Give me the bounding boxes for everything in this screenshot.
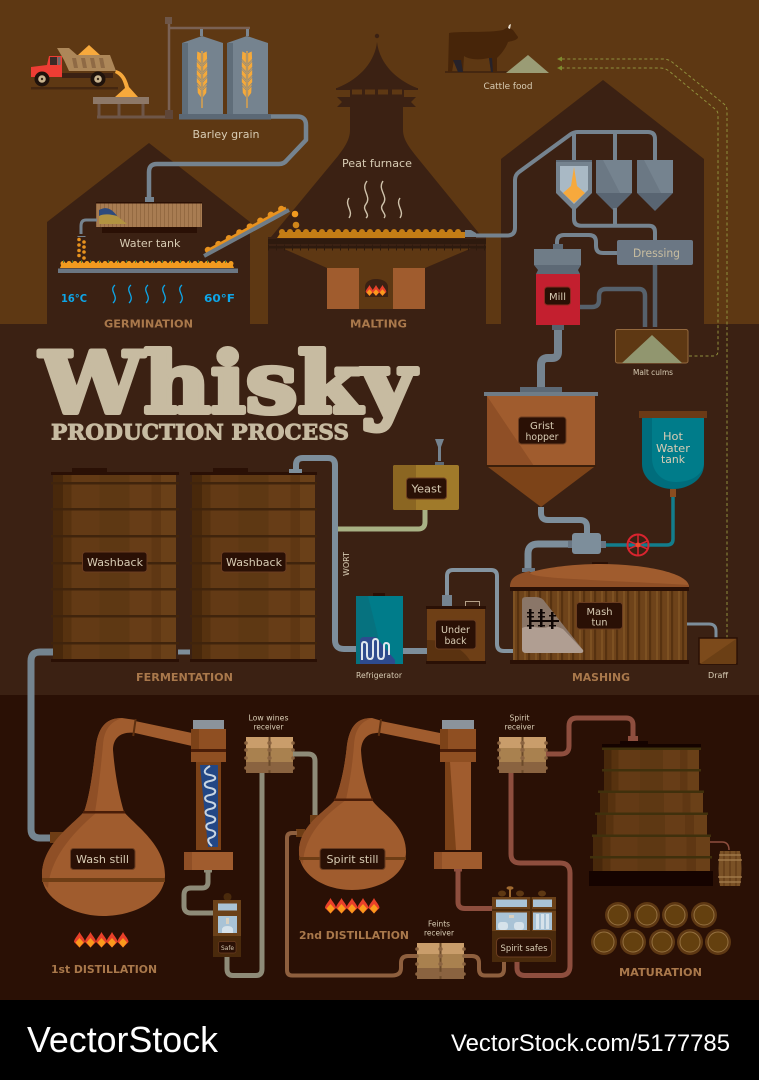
grist hopper: Grist [530, 421, 554, 432]
heading: malting: MALTING [350, 318, 407, 330]
condenser 2 [434, 720, 482, 872]
hot water tank: Water [656, 442, 690, 455]
valve [628, 534, 648, 556]
pipe: underback to mash tun [447, 570, 513, 651]
water tank [77, 197, 202, 260]
panel: germination building [47, 143, 250, 325]
spirit receiver [497, 737, 548, 773]
mill [534, 244, 581, 330]
spirit safes: Spirit safes [500, 944, 548, 954]
panel: malting building [268, 34, 486, 325]
background: upper zone [0, 0, 759, 325]
pipe: spirit receiver to safes return [511, 773, 570, 976]
heading: 2nd distillation: 2nd DISTILLATION [299, 929, 409, 942]
label: cattle food: Cattle food [484, 82, 532, 92]
grist hopper: hopper [526, 432, 559, 443]
spirit still: Spirit still [326, 853, 378, 866]
wash still: Wash still [76, 853, 129, 866]
hot water tank: tank [661, 453, 686, 466]
casks [591, 902, 731, 955]
small barrel [710, 842, 742, 886]
pipe: hopper to mixing box [541, 507, 587, 534]
label: low wines receiver: Low wines [248, 714, 289, 722]
grain chute and loading table [93, 17, 250, 119]
safe: Safe [221, 944, 234, 952]
footer band [0, 1000, 759, 1080]
pipe: condenser 2 to spirit safes [458, 871, 492, 908]
background: lower zone [0, 695, 759, 1001]
maturation vat [589, 736, 713, 886]
label: feints receiver: Feints [428, 920, 450, 928]
washback left [51, 468, 179, 662]
underback: back [444, 636, 467, 647]
underback: Under [441, 625, 471, 636]
pipe: safe to low wines receiver [227, 773, 262, 976]
title: PRODUCTION PROCESS [51, 420, 349, 444]
flames: spirit still [325, 898, 380, 914]
pipe: washback to refrigerator (wort) [296, 458, 357, 649]
pipes: culms lines [580, 265, 655, 327]
feints receiver [415, 943, 466, 979]
grist hopper [484, 387, 598, 507]
malting bed [268, 230, 486, 248]
label: feints receiver [424, 920, 455, 938]
smoke [348, 181, 401, 218]
washback connecting pipe [178, 650, 190, 654]
washback left: Washback [87, 556, 144, 569]
footer: url: VectorStock.com/5177785 [451, 1030, 730, 1057]
mash tun [510, 562, 689, 664]
hoppers [556, 160, 673, 211]
pipe: hot water [605, 497, 673, 545]
mixing box [568, 533, 606, 554]
heading: germination: GERMINATION [104, 318, 193, 330]
label: low wines receiver [248, 714, 289, 732]
mill: Mill [549, 292, 566, 303]
pipe: box to mash tun [528, 544, 572, 570]
pipe: mill to grist hopper [541, 330, 558, 388]
label: spirit receiver: receiver [504, 722, 535, 732]
label: peat furnace: Peat furnace [342, 157, 412, 170]
pipe: refrigerator to underback [403, 648, 427, 654]
hot water tank [639, 411, 707, 497]
label: feints receiver: receiver [424, 928, 455, 938]
heading: 1st distillation: 1st DISTILLATION [51, 963, 157, 976]
label: spirit receiver [504, 714, 535, 732]
pipe: feints to spirit still [287, 833, 418, 976]
pipe: kiln to hoppers [476, 132, 655, 236]
pipe: yeast line [338, 510, 425, 529]
pipes: hoppers to dressing [574, 208, 655, 240]
underback [426, 595, 486, 664]
cow [445, 24, 522, 73]
label: low wines receiver: receiver [254, 722, 284, 732]
germination bed [58, 262, 238, 273]
safe [213, 893, 241, 957]
label: water tank: Water tank [120, 237, 181, 250]
label: barley grain: Barley grain [192, 128, 260, 141]
mash tun: Mash [586, 607, 612, 618]
spirit safes [492, 886, 556, 962]
refrigerator [356, 593, 403, 664]
draff [687, 624, 737, 664]
low wines receiver [244, 737, 295, 773]
label: wort: WORT [342, 552, 351, 576]
yeast box: Yeast [410, 482, 442, 496]
spirit still [296, 718, 440, 890]
mash tun: tun [592, 618, 608, 628]
temperature: 16°C [61, 292, 87, 305]
washback right [190, 468, 317, 662]
pipe: washback to wash still [31, 652, 53, 838]
pipe: spirit receiver to vat [546, 718, 633, 754]
condenser 1 [184, 720, 233, 872]
pipe: low wines to spirit still [293, 754, 315, 816]
pipe: condenser to safe [184, 872, 214, 913]
panel: mill building [501, 80, 704, 325]
pipe: dressing to mill [557, 235, 617, 253]
hot water tank: Hot [663, 430, 684, 443]
label: malt culms: Malt culms [633, 368, 673, 377]
label: spirit receiver: Spirit [510, 714, 530, 722]
heading: maturation: MATURATION [619, 966, 702, 979]
washback right: Washback [226, 556, 283, 569]
dressing box: Dressing [633, 246, 680, 260]
heading: mashing: MASHING [572, 671, 630, 684]
background: middle zone [0, 324, 759, 696]
flames: wash still [74, 932, 128, 948]
malt culms box [616, 330, 688, 363]
label: refrigerator: Refrigerator [356, 671, 403, 680]
pipe: safes to feints [463, 956, 504, 976]
dressing box [617, 240, 693, 265]
title: Whisky [39, 334, 417, 432]
heading: fermentation: FERMENTATION [136, 671, 233, 684]
yeast box [393, 439, 459, 510]
truck [31, 45, 118, 90]
pipe: silo to water tank [149, 116, 306, 199]
temperature [61, 285, 235, 305]
cattle food pile [506, 55, 549, 73]
label: draff: Draff [708, 671, 729, 680]
temperature: 60°F [204, 292, 235, 305]
dashed lines to cattle food [557, 56, 727, 638]
wash still [42, 718, 192, 916]
footer: brand: VectorStock [27, 1019, 219, 1060]
silos: barley grain [179, 36, 271, 120]
conveyor [204, 207, 299, 256]
